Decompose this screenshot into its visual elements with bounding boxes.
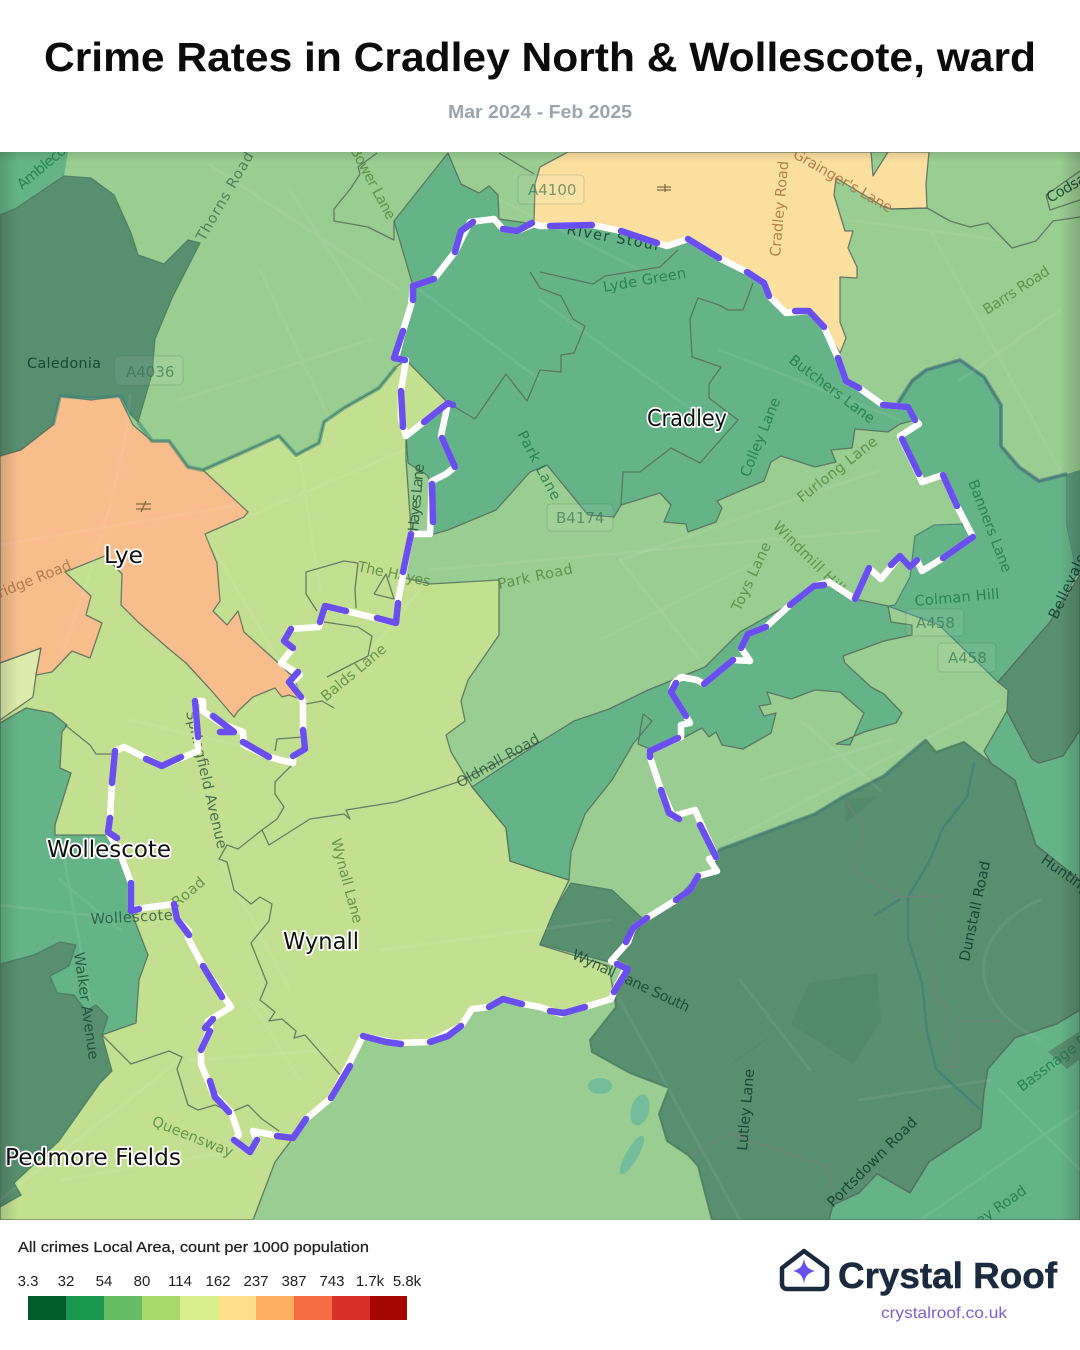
- legend scale labels: 1.7k: [356, 1273, 385, 1290]
- region: darker woodland patches: [700, 797, 881, 1085]
- road labels: Thorns Road: [193, 152, 257, 245]
- road labels: Queensway: [150, 1114, 236, 1161]
- road labels: Oldnall Road: [454, 731, 543, 791]
- road labels: Portsdown Road: [825, 1115, 921, 1211]
- shield: A4100: A4100: [528, 181, 576, 199]
- region: Bannersgate teal: [888, 360, 1077, 682]
- legend scale labels: 387: [281, 1273, 307, 1290]
- road network: [0, 165, 1080, 1220]
- region: south-east teal: [829, 1010, 1080, 1220]
- shield: A458 lower: A458: [948, 649, 987, 667]
- road shields: [115, 175, 996, 672]
- region: east teal: [984, 711, 1080, 880]
- shield: A458: A458: [916, 614, 955, 632]
- legend scale labels: 743: [319, 1273, 345, 1290]
- legend scale labels: 80: [134, 1273, 150, 1290]
- road labels: Colman Hill: [914, 587, 1000, 610]
- road labels: Balds Lane: [318, 641, 390, 705]
- legend scale labels: 162: [205, 1273, 231, 1290]
- region: Caledonia dark: [0, 176, 200, 456]
- place: Wollescote: Wollescote: [47, 837, 171, 863]
- shield: A458 lower: [938, 643, 996, 672]
- road labels: Wollescote: [90, 908, 173, 928]
- road labels: Dunstall Road: [957, 860, 994, 963]
- website: crystalroof.co.uk: [881, 1305, 1008, 1322]
- wordmark: Crystal Roof: [838, 1255, 1058, 1296]
- road labels: Banners Lane: [964, 478, 1014, 575]
- shield: A4100: [518, 175, 584, 204]
- region: green wedge in the yellow: [871, 152, 888, 176]
- legend scale labels: 32: [58, 1273, 74, 1290]
- region: Wollescote teal: [0, 708, 148, 1040]
- place: Pedmore Fields: Pedmore Fields: [5, 1145, 181, 1171]
- road labels: Lutley Lane: [735, 1068, 758, 1151]
- road labels: Springfield Avenue: [182, 709, 229, 850]
- shield: A458: [906, 609, 964, 636]
- ward boundary white: [108, 219, 973, 1152]
- legend scale labels: 54: [96, 1273, 112, 1290]
- internal boundaries: [65, 153, 1080, 1190]
- region: Lye orange: [0, 396, 303, 717]
- stream: [874, 763, 981, 1110]
- station icons: [136, 184, 671, 512]
- logo: Crystal Roof: [780, 1248, 1058, 1322]
- legend scale labels: 237: [243, 1273, 269, 1290]
- region: Walker Avenue dark: [0, 942, 112, 1207]
- region: Wynall yellow-green: [0, 360, 614, 1220]
- legend colour bar: [28, 1296, 407, 1320]
- title: [44, 34, 1036, 122]
- road labels: Barrs Road: [980, 264, 1053, 318]
- title: Mar 2024 - Feb 2025: [448, 102, 632, 122]
- road labels: Wynall Lane: [327, 837, 365, 925]
- road labels: Colley Lane: [738, 396, 784, 479]
- road labels: Hayes Lane: [406, 463, 428, 532]
- shield: A4036: [115, 356, 183, 385]
- river edge shading: [53, 360, 1067, 850]
- road labels: Furlong Lane: [795, 434, 881, 506]
- legend scale labels: 114: [168, 1273, 192, 1290]
- road labels: Road: [169, 874, 209, 911]
- place: Cradley: Cradley: [647, 406, 727, 432]
- place: Wynall: Wynall: [283, 929, 359, 955]
- title: Crime Rates in Cradley North & Wollescote, ward: [44, 34, 1036, 80]
- region: Wynall Lane dark block: [540, 883, 642, 962]
- shield: B4174: [547, 504, 613, 531]
- lakes: [588, 1078, 653, 1177]
- road labels: Windmill Hill: [769, 519, 848, 597]
- map panel: [0, 152, 1080, 1220]
- ward boundary purple dashes: [108, 222, 973, 1152]
- legend: [18, 1239, 422, 1320]
- place: Lye: Lye: [104, 543, 143, 569]
- road labels: Butchers Lane: [786, 352, 878, 427]
- road labels: Caledonia: [27, 356, 101, 372]
- road labels: Lyde Green: [602, 266, 687, 296]
- region: north-east dark: [998, 575, 1080, 763]
- region: north-west teal corner: [0, 152, 68, 215]
- road labels: Toys Lane: [729, 540, 775, 615]
- legend scale labels: 5.8k: [393, 1273, 422, 1290]
- region: Oldnall Road teal: [472, 582, 912, 880]
- road labels: Walker Avenue: [70, 951, 101, 1061]
- shield: B4174: B4174: [556, 509, 604, 527]
- region: Cradley teal: [394, 153, 915, 534]
- road labels: Park Lane: [513, 428, 563, 503]
- legend scale labels: 3.3: [18, 1273, 38, 1290]
- shield: A4036: A4036: [126, 363, 174, 381]
- road labels: River Stour: [565, 222, 662, 254]
- road labels: Park Road: [497, 561, 574, 593]
- region: east edge dark teal: [1067, 470, 1080, 578]
- icon: house with star: [782, 1251, 827, 1289]
- region: south-east dark sliver: [1048, 1031, 1080, 1069]
- road labels: The Hayes: [355, 559, 432, 590]
- road labels: Cradley Road: [768, 160, 792, 257]
- legend scale labels: [18, 1273, 422, 1290]
- legend title: All crimes Local Area, count per 1000 population: [18, 1239, 369, 1256]
- place labels: [5, 406, 727, 1171]
- region: Cradley Heath pale yellow: [534, 152, 929, 353]
- region: pale yellow-green west: [0, 648, 41, 720]
- region: Lutley dark: [590, 740, 1080, 1220]
- road labels: Wynall Lane South: [569, 947, 692, 1016]
